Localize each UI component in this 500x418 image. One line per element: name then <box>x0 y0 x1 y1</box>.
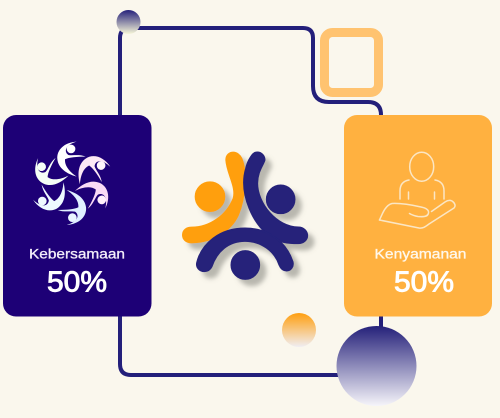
icon: circle of people <box>28 142 115 225</box>
value: 50%: 50% <box>47 267 107 299</box>
value: 50%: 50% <box>394 267 454 299</box>
navy figure right <box>244 152 307 243</box>
navy figure bottom <box>197 228 293 279</box>
label: Kebersamaan: Kebersamaan <box>29 246 125 262</box>
panel: Kebersamaan <box>3 115 152 316</box>
label: Kenyamanan: Kenyamanan <box>374 246 466 262</box>
small orange circle <box>282 313 316 347</box>
central logo <box>183 152 307 279</box>
orange figure <box>183 152 245 243</box>
icon: hand holding person <box>380 152 455 228</box>
panel: Kenyamanan <box>344 115 492 316</box>
connector line <box>120 28 381 375</box>
large gradient circle <box>336 326 416 406</box>
small top circle <box>116 10 140 34</box>
decorative orange square <box>324 32 378 92</box>
